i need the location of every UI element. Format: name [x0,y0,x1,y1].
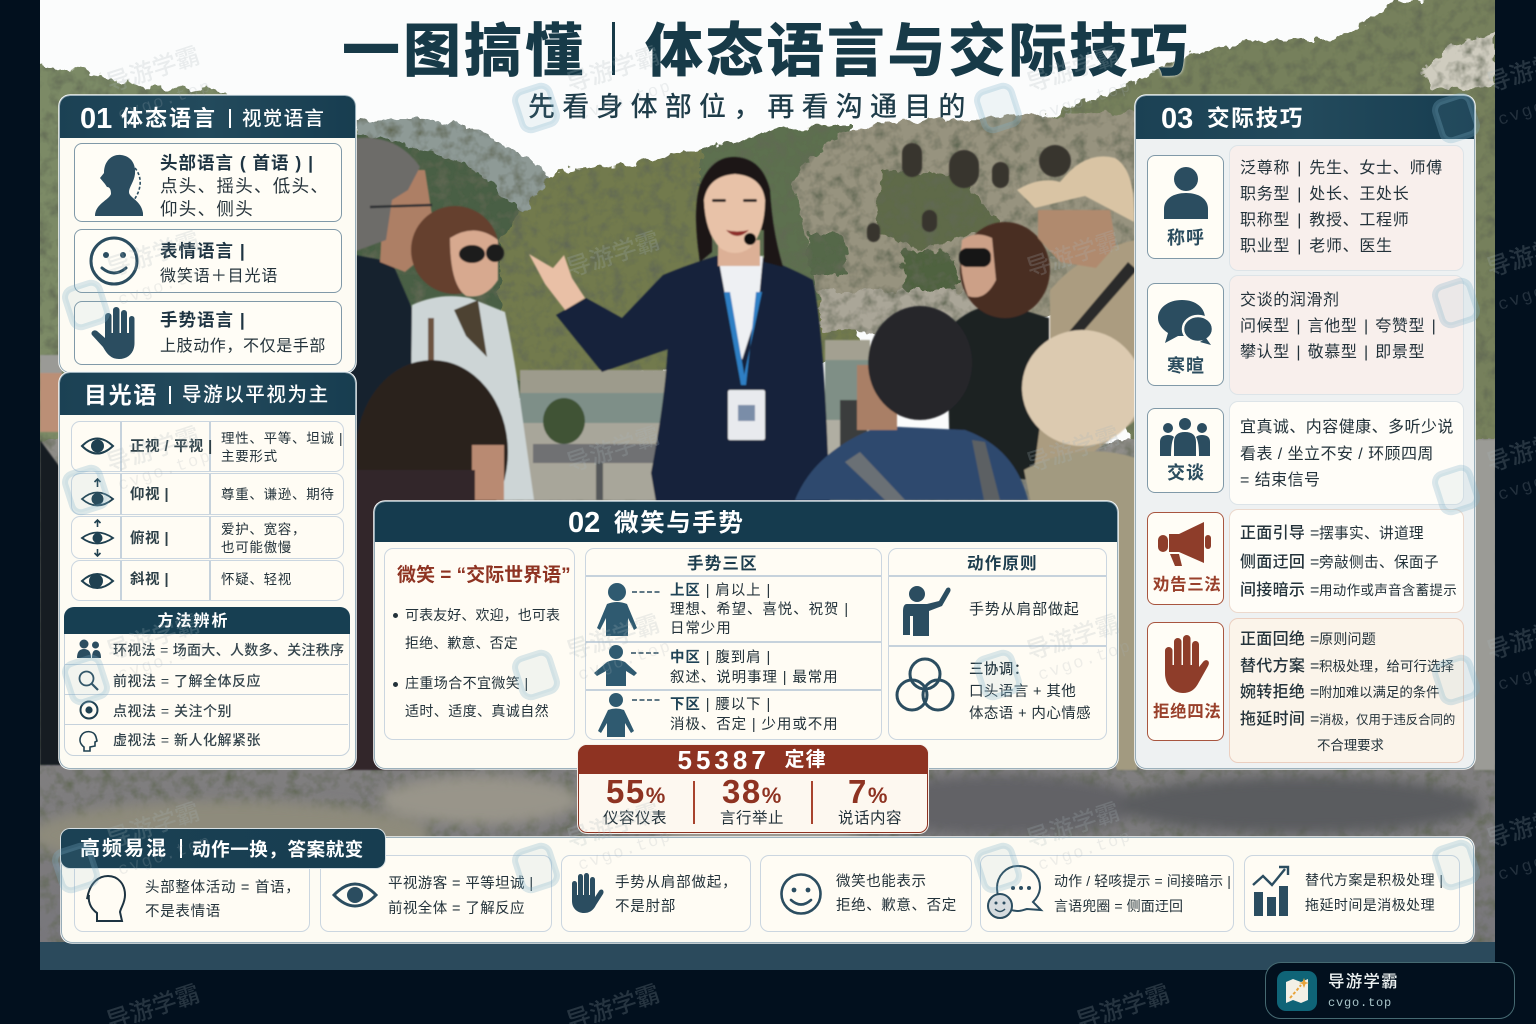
text: downward gaze meaning: 也可能傲慢 [221,540,292,555]
text: head activity: 不是表情语 [145,904,221,920]
watermarks: 导游学霸 [104,610,203,666]
text: lower zone [670,696,839,733]
zone: upper [597,582,849,637]
panel: eye language [60,373,355,768]
text: head activity [145,876,300,924]
stat: 7 percent: 说话内容 [838,810,902,827]
text: scan method: 环视法 = 场面大、人数多、关注秩序 [113,642,344,658]
guide: hair and face [696,157,783,267]
text: lower zone: 下区 | 腰以下 | [670,697,771,713]
woman right in black [947,305,1049,480]
icon: person upper [597,583,660,636]
card: address text: 职称型 | 教授、工程师 [1240,212,1409,229]
heading: 55387 rule: 55387 [678,744,770,774]
heading: eye language [60,373,355,415]
heading: 02 [375,502,1117,542]
card: conversation text [1229,401,1464,505]
card: gesture language [74,301,342,365]
card: persuasion text [1229,509,1464,613]
heading: 01: 01 [80,103,112,135]
text: upper zone: 日常少用 [670,621,732,637]
card: conversation text: 宜真诚、内容健康、多听少说 [1240,419,1454,436]
card: greeting text: 问候型 | 言他型 | 夸赞型 | [1240,318,1436,335]
watermarks: cvgo.top [116,637,215,686]
watermarks: cvgo.top [576,637,675,686]
text: three coordination: 三协调： [969,662,1029,678]
bottom dark band [40,942,1495,970]
text: point method: 点视法 = 关注个别 [113,703,232,719]
card: refusal text: 拖延时间 = [1240,711,1320,728]
label: conversation: 交谈 [1167,463,1205,483]
man left [345,253,420,520]
heading tab: common confusions: 高频易混 [80,838,168,860]
card: address text [1229,145,1464,271]
text: hint [1054,869,1231,919]
woman with sunglasses [410,296,534,500]
icon: people [77,640,101,658]
label: upward gaze: 仰视 | [130,487,169,503]
icon: eye up and down [80,519,114,557]
row: direct gaze [71,421,344,472]
text: smile bullet 2: 庄重场合不宜微笑 | [405,675,529,691]
watermarks: cvgo.top [1036,637,1135,686]
card: refusal text: 原则问题 [1319,632,1376,648]
card: address text: 职务型 | 处长、王处长 [1240,186,1409,203]
stat: 55 percent: 仪容仪表 [603,810,667,827]
foreground dark hair [356,360,508,544]
text: alternatives: 替代方案是积极处理 | [1305,872,1443,888]
card: persuasion text: 用动作或声音含蓄提示 [1319,583,1457,598]
watermarks: 导游学霸 [104,798,203,854]
icon: red hand [1165,635,1209,693]
text: head language [160,153,329,219]
card: conversation text: = 结束信号 [1240,472,1320,489]
text: smile also: 微笑也能表示 [836,874,927,890]
text: alternatives: 拖延时间是消极处理 [1305,897,1435,913]
heading: methods: 方法辨析 [158,612,230,630]
watermarks: 导游学霸 [104,42,203,98]
title [342,19,1190,84]
icon: hand [91,307,134,359]
heading: 03 [1136,96,1474,139]
left edge people [40,362,62,432]
text: lower zone: 消极、否定 | 少用或不用 [670,717,839,733]
watermarks: 导游学霸 [1024,422,1123,478]
icon: hand [572,873,604,913]
text: smile bullet 1 [393,607,560,651]
text: level gaze: 前视全体 = 了解反应 [388,901,525,917]
label: greeting: 寒暄 [1167,356,1205,376]
watermarks: cvgo.top [576,827,675,876]
card: persuasion text: 侧面迂回 = [1240,554,1320,570]
card: refusal text: 替代方案 = [1240,658,1320,675]
text: from shoulder: 不是肘部 [615,899,676,915]
row: scan method [65,633,348,665]
heading: gesture zones: 手势三区 [687,555,758,573]
zone: middle [594,645,839,686]
icon: head silhouette [95,154,143,216]
text: gesture language: 手势语言 | [160,310,246,330]
heading: 55387 rule: 定律 [784,748,826,770]
watermarks: 导游学霸 [104,422,203,478]
panel: 03 communication skills [1136,96,1474,768]
icon: target [80,700,98,720]
icon: person middle [594,645,658,686]
card: persuasion text: 摆事实、讲道理 [1319,526,1424,542]
icon: group [1160,418,1210,456]
card: head activity [74,855,310,932]
label: address: 称呼 [1167,228,1205,248]
icon: head outline [87,875,126,923]
row: virtual method [79,730,261,752]
panel: common confusions [62,838,1473,942]
watermarks: 导游学霸 [564,42,663,98]
text: three coordination: 体态语 + 内心情感 [969,706,1091,722]
text: gesture language: 上肢动作，不仅是手部 [160,338,326,355]
card: persuasion icon [1147,512,1224,605]
card: expression language [74,229,342,293]
panel: 01 body language [60,96,355,372]
text: downward gaze meaning: 爱护、宽容， [221,522,306,537]
heading: 03: 交际技巧 [1207,106,1304,131]
heading: eye language: 目光语 [84,382,158,408]
text: head language: 头部语言 ( 首语 ) | [160,153,314,173]
card: refusal text [1229,618,1464,763]
card: refusal text: 婉转拒绝 = [1240,684,1320,701]
icon: sidelong eye [80,573,114,589]
icon: magnifier [78,670,99,691]
text: smile bullet 1: 可表友好、欢迎，也可表 [405,607,560,623]
text: hint: 动作 / 轻咳提示 = 间接暗示 | [1054,873,1231,889]
card: greeting icon [1147,283,1224,386]
text: start at shoulder: 手势从肩部做起 [969,601,1080,618]
text: upward gaze meaning: 尊重、谦逊、期待 [221,487,335,502]
icon: person raising arm [903,586,950,636]
text: head language: 点头、摇头、低头、 [160,176,329,196]
text: three coordination [969,661,1091,722]
card: refusal text: 正面回绝 = [1240,631,1320,648]
panel: 02 smile and gesture [375,502,1117,768]
watermarks: cvgo.top [1036,77,1135,126]
card: refusal text: 附加难以满足的条件 [1319,685,1440,700]
card: refusal text: 积极处理，给可行选择 [1319,659,1454,674]
card: smile [384,548,575,740]
heading: methods [64,606,350,634]
woman with sun hat [1024,451,1136,770]
text: from shoulder: 手势从肩部做起， [615,875,737,891]
river scene [520,370,680,397]
text: level gaze: 平视游客 = 平等坦诚 | [388,876,534,892]
card: persuasion text: 旁敲侧击、保面子 [1319,554,1439,570]
text: level gaze [388,872,534,922]
icon: speech bubbles [1158,300,1212,345]
icon: bubble and face [988,865,1042,919]
label: sidelong gaze: 斜视 | [130,572,169,588]
label: refusal: 拒绝四法 [1153,703,1221,721]
text: alternatives [1305,868,1443,918]
icon: eye [333,881,377,909]
stat: 55 percent: 55% [606,773,667,810]
text: brand name: 导游学霸 [1328,973,1399,991]
brand badge [1265,962,1515,1019]
guide: arm and hand [556,275,680,372]
heading: 03: 03 [1161,103,1193,135]
heading: smile world language: 微笑 = “交际世界语” [397,565,571,586]
text: smile also [836,870,957,918]
text: upper zone: 上区 | 肩以上 | [670,583,771,599]
title: 体态语言与交际技巧 [645,19,1190,84]
text: expression language: 微笑语＋目光语 [160,268,278,285]
card: head language [74,143,342,222]
watermarks: 导游学霸 [1024,610,1123,666]
heading: 01: 体态语言 [121,106,217,131]
watermarks: 导游学霸 [104,227,203,283]
man from behind [795,426,1028,500]
man with cap [1030,240,1136,500]
sub-panel: methods [64,607,350,756]
stat: 38 percent: 言行举止 [720,810,784,827]
text: direct gaze meaning [221,431,343,464]
watermarks: cvgo.top [116,262,215,311]
stat: 38 percent [720,773,784,827]
card: address text: 职业型 | 老师、医生 [1240,238,1393,255]
card: hint [980,855,1234,932]
text: brand url: cvgo.top [1328,996,1392,1010]
text: direct gaze meaning: 理性、平等、坦诚 | [221,431,343,446]
icon: smile [90,236,138,286]
text: smile bullet 2: 适时、适度、真诚自然 [405,702,549,718]
stat: 7 percent [838,773,902,827]
icon: eye up [80,478,114,506]
row: sidelong gaze [71,560,344,601]
text: upper zone [670,582,849,637]
row: front-view method [65,665,348,695]
heading: 55387 rule [578,744,928,774]
heading: 02: 微笑与手势 [614,510,744,537]
watermarks: 导游学霸 [564,610,663,666]
text: expression language [160,241,278,285]
icon: megaphone [1158,522,1211,566]
heading: 02: 02 [568,507,600,539]
watermarks: 导游学霸 [564,798,663,854]
card: alternatives [1244,855,1460,932]
text: downward gaze meaning [221,522,306,555]
text: middle zone: 叙述、说明事理 | 最常用 [670,670,839,686]
watermarks: 导游学霸 [1024,42,1123,98]
ground blotches [30,775,1480,869]
card: persuasion text: 正面引导 = [1240,525,1320,542]
heading: eye language: 导游以平视为主 [182,384,330,406]
stat: 55 percent [603,773,667,827]
card: address icon [1147,155,1224,259]
watermarks: cvgo.top [576,77,675,126]
text: smile also: 拒绝、歉意、否定 [836,898,957,914]
heading: 01 [60,96,355,138]
text: smile bullet 1: 拒绝、歉意、否定 [405,635,518,651]
card: address text: 泛尊称 | 先生、女士、师傅 [1240,160,1443,177]
stat: 38 percent: 38% [722,773,783,810]
icon: person [1164,167,1208,219]
text: head language: 仰头、侧头 [160,199,254,219]
text: three coordination: 口头语言 + 其他 [969,684,1076,700]
text: hint: 言语兜圈 = 侧面迂回 [1054,898,1183,914]
text: upper zone: 理想、希望、喜悦、祝贺 | [670,602,849,618]
watermarks: 导游学霸 [564,422,663,478]
text: direct gaze meaning: 主要形式 [221,449,278,464]
row: upward gaze [71,473,344,515]
text: head activity: 头部整体活动 = 首语， [145,880,300,896]
guide: suit [651,255,830,502]
text: smile bullet 2 [393,675,549,718]
heading: action principles: 动作原则 [967,555,1038,573]
zone: lower [598,693,839,737]
icon: three rings [896,658,954,712]
card: refusal icon [1147,622,1224,741]
icon: head outline [79,730,98,752]
card: level gaze [320,855,552,932]
text: middle zone: 中区 | 腹到肩 | [670,650,771,666]
icon: person lower [598,693,660,737]
heading tab: common confusions: 动作一换，答案就变 [192,839,364,860]
label: persuasion: 劝告三法 [1153,576,1221,594]
cliff arches [867,143,1071,242]
label: direct gaze: 正视 / 平视 | [130,439,213,455]
text: front-view method: 前视法 = 了解全体反应 [113,673,261,689]
gap fills behind panels [1117,500,1137,770]
card: greeting text: 攀认型 | 敬慕型 | 即景型 [1240,344,1425,361]
card: smile also [760,855,972,932]
card: conversation text: 看表 / 坐立不安 / 环顾四周 [1240,446,1434,462]
watermarks: 导游学霸 [564,227,663,283]
text: gesture language [160,310,326,355]
icon: map logo [1277,971,1317,1011]
watermarks: cvgo.top [116,832,215,881]
card: greeting text: 交谈的润滑剂 [1240,292,1340,309]
text: virtual method: 虚视法 = 新人化解紧张 [113,732,261,748]
card: greeting text [1229,275,1464,395]
text: middle zone [670,649,839,686]
icon: smile [780,873,822,915]
subtitle: 先看身体部位，再看沟通目的 [528,92,973,122]
card: persuasion text: 间接暗示 = [1240,582,1320,599]
heading tab: common confusions [61,829,385,868]
icon: rising bars [1252,865,1290,917]
row: point method [65,695,348,725]
watermarks: cvgo.top [1036,827,1135,876]
heading: 01: 视觉语言 [242,108,325,130]
stat: 7 percent: 7% [848,773,889,810]
text: from shoulder [615,871,737,919]
card: from shoulder [561,855,751,932]
card: action principles [888,548,1107,740]
title: 一图搞懂 [342,19,586,84]
row: downward gaze [71,516,344,559]
text: sidelong gaze meaning: 怀疑、轻视 [221,572,292,587]
watermarks: 导游学霸 [1024,227,1123,283]
card: refusal text: 消极，仅用于违反合同的 [1319,713,1455,727]
watermarks: 导游学霸 [1024,798,1123,854]
icon: eye [80,438,114,454]
card: conversation icon [1147,408,1224,493]
watermarks: cvgo.top [116,447,215,496]
card: three gesture zones [585,548,882,740]
label: downward gaze: 俯视 | [130,531,169,547]
card: refusal text: 不合理要求 [1317,738,1384,753]
text: expression language: 表情语言 | [160,241,246,261]
panel: 55387 rule [578,745,928,833]
watermarks: cvgo.top [116,77,215,126]
